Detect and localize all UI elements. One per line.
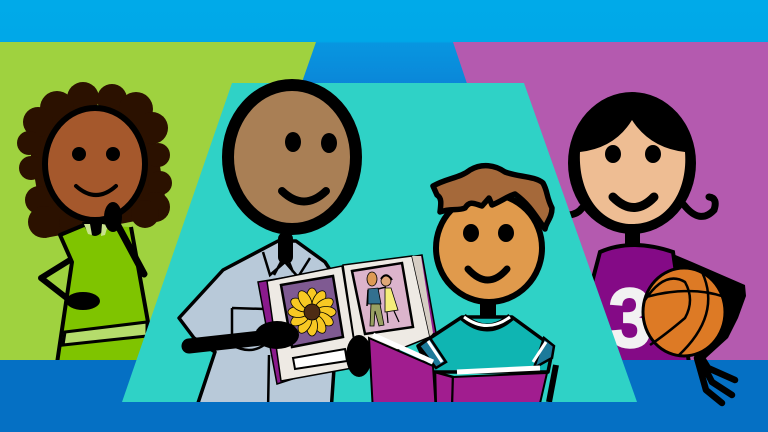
smile	[282, 191, 326, 202]
white collar trim	[464, 317, 510, 326]
character: man with photo album	[179, 85, 356, 412]
photo album	[258, 255, 436, 384]
neck	[625, 230, 640, 252]
collar and neck	[82, 222, 108, 236]
raised arm and hand	[104, 202, 144, 274]
curly hair	[17, 82, 172, 238]
eyes	[463, 224, 514, 242]
left cover	[368, 336, 434, 402]
eyes	[72, 147, 120, 161]
face	[580, 120, 685, 224]
basketball	[643, 268, 725, 356]
right page	[343, 256, 430, 366]
man's other hand	[346, 335, 372, 377]
arm behind ball	[673, 254, 746, 358]
shirt	[177, 239, 336, 402]
album cover	[258, 255, 436, 384]
resting hand	[66, 292, 100, 310]
character: girl with curly hair	[17, 82, 172, 370]
character: boy reading	[418, 166, 554, 372]
panel: green	[0, 42, 316, 360]
man in picture	[367, 272, 386, 326]
eyes	[605, 145, 661, 163]
family picture	[352, 263, 413, 334]
head	[436, 194, 542, 302]
spine	[434, 374, 454, 402]
dress stripe	[63, 322, 147, 345]
sunflower picture	[281, 276, 343, 347]
shirt details	[232, 252, 310, 412]
teal shirt	[418, 317, 553, 372]
sunflower	[288, 288, 336, 336]
hair	[433, 166, 552, 229]
smile	[468, 269, 507, 280]
head and hair	[568, 92, 696, 234]
caption box	[293, 349, 347, 369]
open purple book	[369, 335, 556, 412]
head	[228, 85, 356, 229]
eyes	[285, 132, 337, 153]
left arm	[41, 260, 70, 299]
sleeves	[419, 338, 554, 368]
man's forearm and hand	[189, 321, 299, 349]
fingers	[697, 350, 735, 403]
neck	[480, 298, 496, 322]
collar	[463, 317, 511, 328]
boy's thumb	[549, 365, 556, 402]
character: girl with basketball	[568, 92, 746, 403]
jersey number: 3	[608, 271, 652, 365]
right cover	[451, 374, 548, 402]
green dress	[56, 225, 148, 370]
smile	[76, 186, 116, 195]
panel: purple	[453, 42, 768, 360]
neck	[278, 232, 293, 264]
panel: teal	[122, 83, 637, 402]
book pages	[373, 335, 540, 372]
hair curls	[569, 197, 715, 216]
purple jersey	[590, 245, 690, 370]
head	[45, 108, 145, 220]
smile	[613, 197, 654, 208]
woman in picture	[381, 275, 399, 323]
left page	[267, 266, 358, 381]
page edge	[412, 256, 433, 337]
